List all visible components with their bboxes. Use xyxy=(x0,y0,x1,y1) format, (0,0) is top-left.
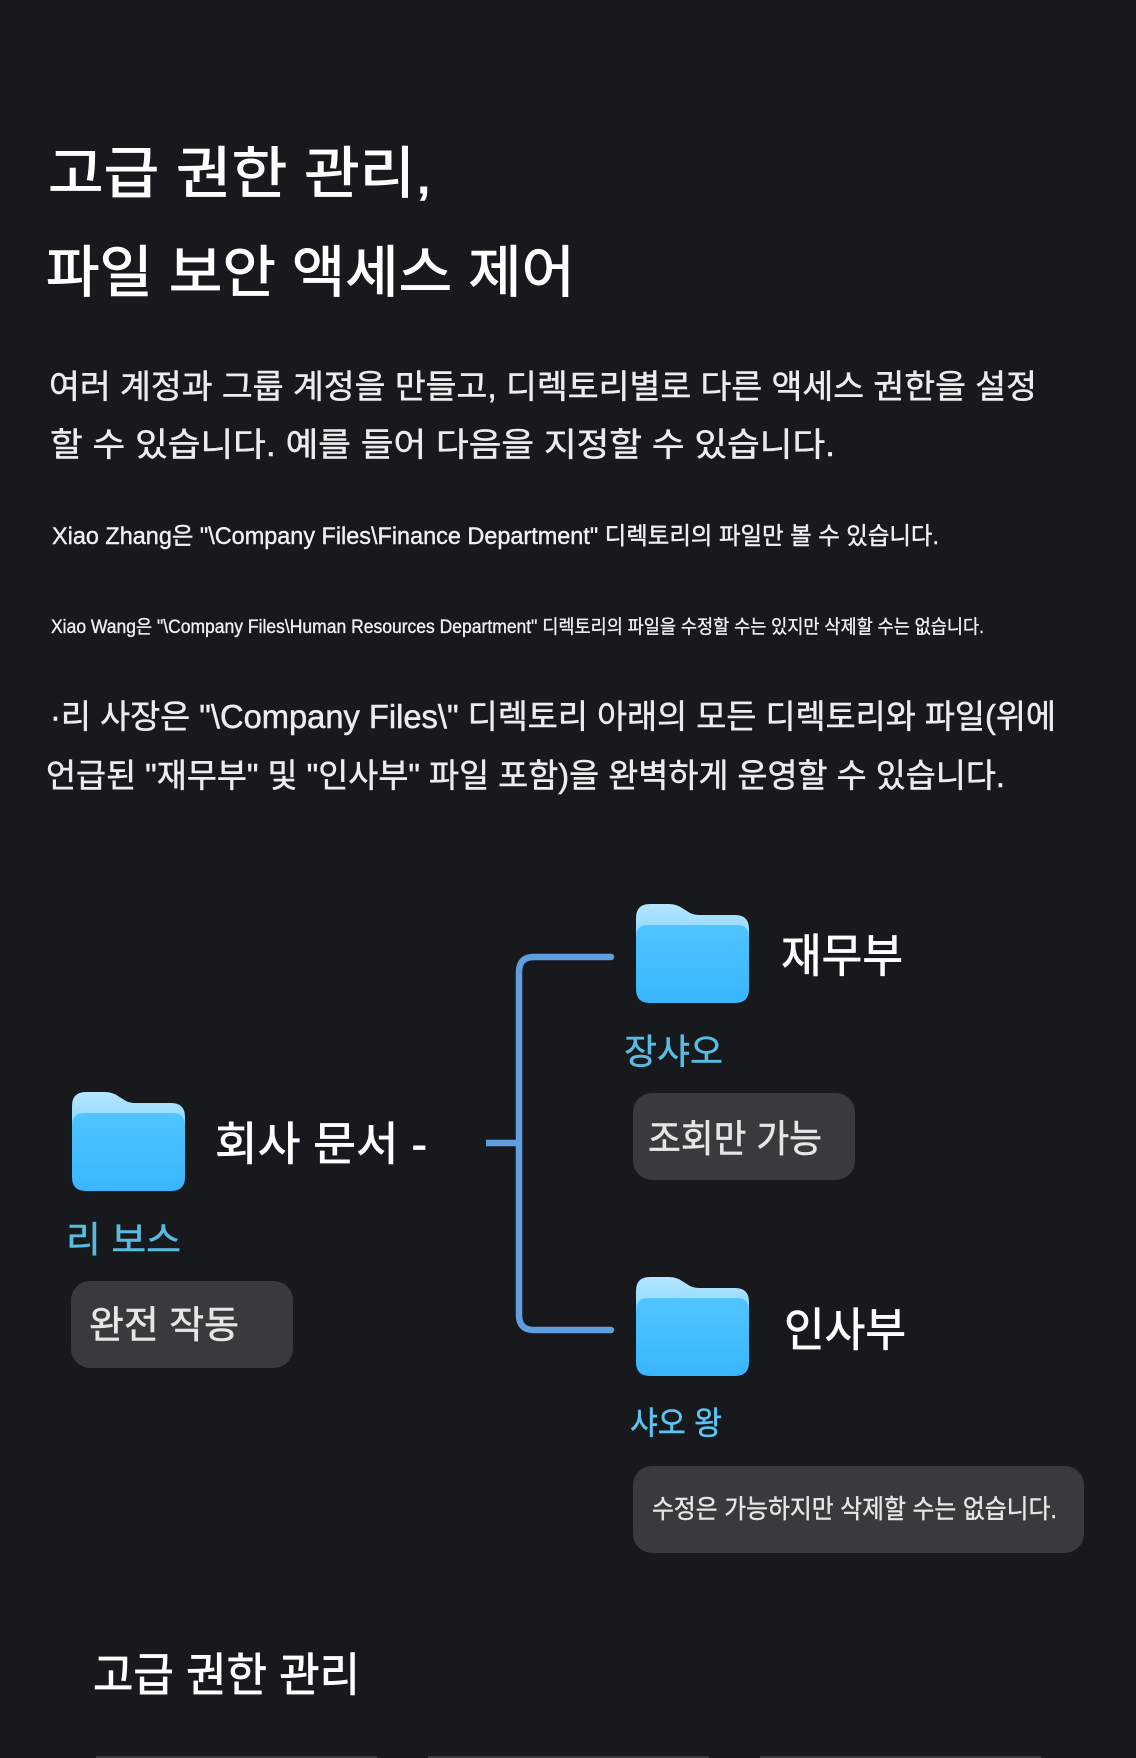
icon: folder xyxy=(636,1277,749,1376)
icon: folder xyxy=(72,1092,185,1191)
title: 파일 보안 액세스 제어 xyxy=(46,241,575,304)
pill: view only xyxy=(633,1093,855,1180)
heading: advanced permission management: 고급 권한 관리 xyxy=(93,1649,360,1701)
label: Zhang Xiao: 장샤오 xyxy=(624,1033,723,1072)
pill: full operation xyxy=(71,1281,293,1368)
title: 고급 권한 관리, xyxy=(48,142,432,205)
intro paragraph: 여러 계정과 그룹 계정을 만들고, 디렉토리별로 다른 액세스 권한을 설정 xyxy=(49,368,1037,405)
pill: full operation: 완전 작동 xyxy=(89,1305,239,1347)
text: Xiao Zhang permission: Xiao Zhang은 "\Company Files\Finance Department" 디렉토리의 파일만 볼 수 있습니다. xyxy=(52,523,939,550)
text: boss permission: 언급된 "재무부" 및 "인사부" 파일 포함)을 완벽하게 운영할 수 있습니다. xyxy=(46,757,1005,794)
heading: finance department: 재무부 xyxy=(781,930,903,982)
text: boss permission: ·리 사장은 "\Company Files\" 디렉토리 아래의 모든 디렉토리와 파일(위에 xyxy=(50,698,1056,735)
panel: finance department xyxy=(624,904,903,1180)
icon: folder xyxy=(636,904,749,1003)
label: Xiao Wang: 샤오 왕 xyxy=(630,1405,722,1441)
text: Xiao Wang permission: Xiao Wang은 "\Company Files\Human Resources Department" 디렉토리의 파일을 수정할 수는 있지만 삭제할 수는 없습니다. xyxy=(51,616,984,638)
label: Boss Li: 리 보스 xyxy=(66,1219,181,1260)
panel: company documents xyxy=(66,1092,427,1368)
text: boss permission xyxy=(46,698,1056,794)
pill: edit but no delete xyxy=(633,1466,1084,1553)
title xyxy=(46,142,575,304)
cards cut off at bottom edge xyxy=(96,1756,1041,1758)
pill: edit but no delete: 수정은 가능하지만 삭제할 수는 없습니다. xyxy=(652,1494,1057,1524)
intro paragraph: 할 수 있습니다. 예를 들어 다음을 지정할 수 있습니다. xyxy=(50,426,835,463)
connector bracket xyxy=(486,957,611,1330)
heading: company documents: 회사 문서 - xyxy=(215,1118,427,1170)
pill: view only: 조회만 가능 xyxy=(648,1119,822,1161)
panel: human resources department xyxy=(630,1277,1084,1553)
heading: human resources department: 인사부 xyxy=(784,1304,906,1356)
intro paragraph xyxy=(49,368,1037,463)
